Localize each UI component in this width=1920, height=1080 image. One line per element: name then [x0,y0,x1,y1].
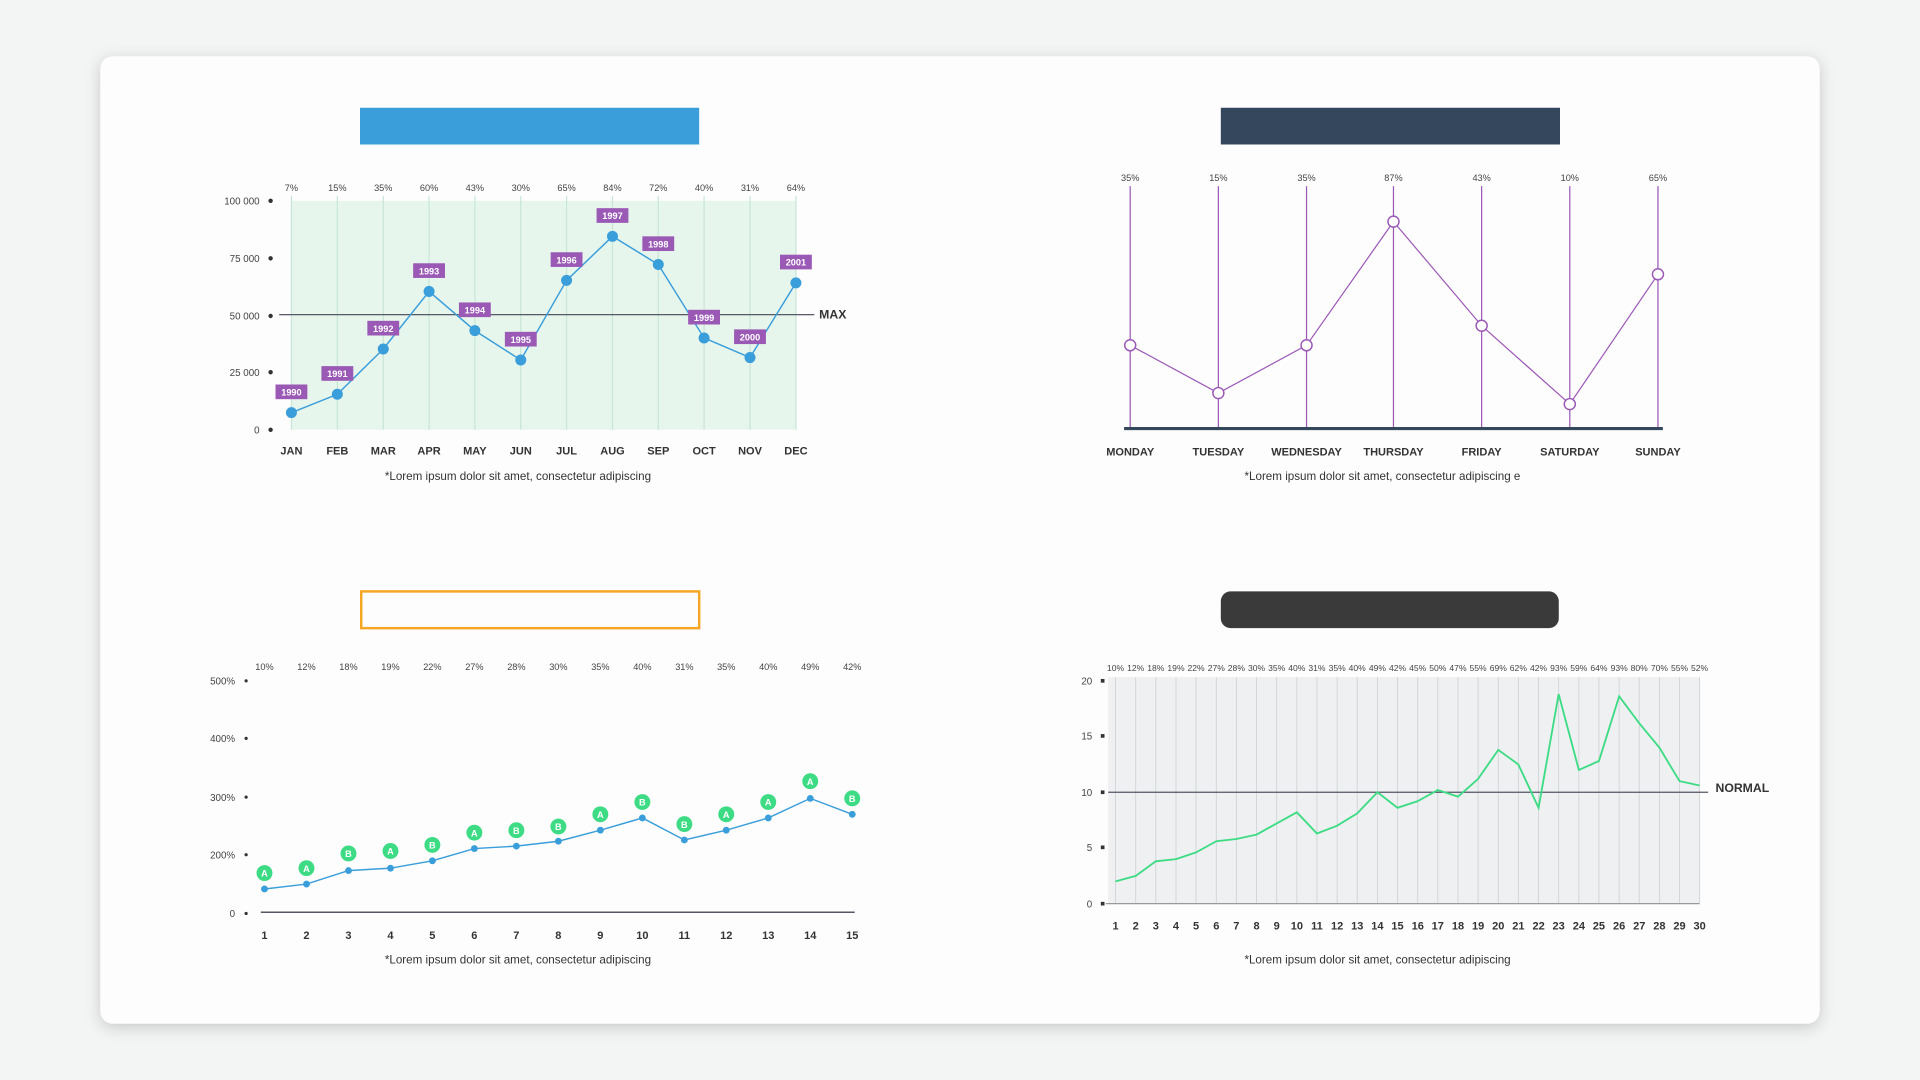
chart: 28 [1653,920,1666,932]
chart: 300% [210,793,235,804]
chart area: 31% [741,183,759,193]
chart: 3 [345,930,352,942]
chart area: MAY [463,445,487,457]
chart: A [261,869,268,879]
chart area: MAR [371,445,396,457]
chart: 35% [591,662,610,672]
chart area: 0 [254,425,260,436]
chart: 0 [230,909,236,920]
chart: 80% [1631,663,1648,673]
chart: 35% [1297,173,1316,183]
chart: 10% [255,662,274,672]
chart: 42% [843,662,861,672]
chart: 8 [555,930,561,942]
chart: 13 [1351,920,1363,932]
chart: NORMAL [1716,781,1770,795]
chart: 15% [1209,173,1228,183]
chart: A [723,810,730,820]
chart: 0 [1087,899,1093,910]
chart: 5 [1087,843,1093,854]
chart area: 30% [512,183,530,193]
chart: 31% [675,662,694,672]
chart area: JUL [556,445,577,457]
chart: A [471,828,478,838]
chart: 64% [1590,663,1608,673]
chart: 93% [1611,663,1628,673]
chart: TUESDAY [1193,447,1245,459]
chart: B [555,822,562,832]
chart area: JAN [280,445,302,457]
chart: 22% [423,662,442,672]
chart area: 2000 [740,332,760,342]
chart: 27% [1208,663,1225,673]
chart: 15 [846,930,858,942]
chart: 31% [1308,663,1326,673]
chart: 9 [1274,920,1280,932]
chart: 20 [1492,920,1504,932]
chart: 22% [1188,663,1205,673]
chart area: 64% [787,183,805,193]
chart: 50% [1429,663,1447,673]
chart area: SEP [647,445,669,457]
chart: 40% [1288,663,1306,673]
chart area: 1998 [648,239,668,249]
panel: growth chart [210,591,861,967]
chart: 27% [465,662,484,672]
chart area: 1995 [511,335,531,345]
chart: 8 [1254,920,1260,932]
chart: 70% [1651,663,1668,673]
chart: 24 [1573,920,1586,932]
chart [210,662,861,942]
chart area: 35% [374,183,392,193]
chart: A [387,847,394,857]
chart: 7 [1233,920,1239,932]
chart: 18% [339,662,358,672]
chart: 59% [1570,663,1588,673]
panel: daily chart [1081,591,1770,967]
chart area: 1990 [281,388,302,398]
chart: 15 [1391,920,1404,932]
chart: 35% [1121,173,1139,183]
chart: MONDAY [1106,447,1155,459]
chart: 45% [1409,663,1427,673]
chart: 12 [720,930,732,942]
chart: A [597,810,604,820]
chart: 21 [1512,920,1525,932]
panel: monthly line chart [224,108,847,483]
chart area [224,183,847,457]
chart: 17 [1432,920,1444,932]
chart area: 50 000 [230,312,260,323]
chart: 20 [1081,676,1093,687]
chart: 6 [1213,920,1219,932]
chart: 13 [762,930,774,942]
chart area: OCT [692,445,716,457]
chart [1081,663,1770,932]
chart: 12% [1127,663,1145,673]
caption: *Lorem ipsum dolor sit amet, consectetur adipiscing [385,470,651,483]
chart: 16 [1412,920,1424,932]
chart: 400% [210,734,235,745]
chart: 22 [1532,920,1545,932]
chart: 87% [1384,173,1403,183]
chart: 11 [1311,920,1323,932]
chart: 14 [1371,920,1384,932]
chart: 18% [1147,663,1165,673]
chart area: 75 000 [230,254,260,265]
chart: 55% [1671,663,1688,673]
chart area: 2001 [786,258,806,268]
chart: 35% [1268,663,1286,673]
chart: 1 [1112,920,1119,932]
chart area: 1996 [556,255,577,265]
title bar rounded dark [1221,591,1559,628]
chart: 2 [303,930,310,942]
chart area: 1992 [373,324,393,334]
chart: 12% [297,662,316,672]
chart area: 84% [603,183,622,193]
chart: 7 [513,930,519,942]
chart: 5 [429,930,435,942]
chart [1106,173,1681,459]
chart: 29 [1673,920,1686,932]
caption: *Lorem ipsum dolor sit amet, consectetur adipiscing [385,954,651,967]
chart: 10 [1081,788,1093,799]
chart area: 1997 [602,211,623,221]
chart: 65% [1649,173,1667,183]
chart: 30 [1693,920,1706,932]
chart: FRIDAY [1462,447,1502,459]
chart: 28% [1228,663,1245,673]
chart: SATURDAY [1540,447,1600,459]
chart: 4 [387,930,394,942]
chart: 40% [759,662,777,672]
chart: 49% [1369,663,1386,673]
chart: 10% [1561,173,1579,183]
title bar outline orange [361,591,699,628]
chart: 5 [1193,920,1199,932]
chart: 69% [1490,663,1507,673]
chart: 18 [1452,920,1464,932]
chart: 25 [1593,920,1605,932]
chart: 42% [1389,663,1406,673]
chart: 40% [1349,663,1366,673]
caption: *Lorem ipsum dolor sit amet, consectetur adipiscing [1244,954,1511,967]
chart area: 65% [557,183,576,193]
caption: *Lorem ipsum dolor sit amet, consectetur adipiscing e [1244,470,1520,483]
chart: 42% [1530,663,1548,673]
chart: 11 [679,930,690,942]
chart: 23 [1553,920,1565,932]
chart: B [849,794,856,804]
chart: 35% [1329,663,1346,673]
chart area: 1999 [694,313,714,323]
chart: 2 [1133,920,1139,932]
chart area: 60% [420,183,438,193]
chart: 19% [381,662,400,672]
chart: 19% [1167,663,1185,673]
chart: 14 [804,930,817,942]
panel: weekly chart [1106,108,1681,483]
chart area: DEC [784,445,808,457]
chart: 49% [801,662,819,672]
chart area: FEB [326,445,348,457]
chart: 6 [471,930,477,942]
chart: 10 [1291,920,1303,932]
chart: 19 [1472,920,1484,932]
chart: 93% [1550,663,1568,673]
chart: B [681,820,688,830]
chart: 27 [1633,920,1645,932]
chart: 26 [1613,920,1625,932]
title bar dark [1221,108,1560,144]
chart area: 1991 [327,369,348,379]
chart: SUNDAY [1635,447,1681,459]
title bar blue [360,108,699,144]
chart: 43% [1472,173,1491,183]
chart: 52% [1691,663,1709,673]
chart: THURSDAY [1363,447,1424,459]
chart: 10 [636,930,649,942]
chart: B [345,849,352,859]
chart: 40% [633,662,652,672]
chart: 1 [261,930,268,942]
chart area: 25 000 [230,368,260,379]
chart: A [807,777,814,787]
chart area: 40% [695,183,713,193]
chart area: 7% [285,183,298,193]
chart: 15 [1081,732,1093,743]
chart area: 1994 [465,305,486,315]
chart: A [303,864,310,874]
chart: 55% [1470,663,1487,673]
chart: 62% [1510,663,1527,673]
chart: 35% [717,662,735,672]
chart area: AUG [600,445,625,457]
chart: 47% [1449,663,1467,673]
chart: 30% [1248,663,1266,673]
chart: B [513,826,520,836]
chart: 9 [597,930,603,942]
chart: B [639,798,646,808]
chart: 4 [1173,920,1180,932]
chart: 12 [1331,920,1343,932]
chart area: 15% [328,183,347,193]
chart area: 72% [649,183,667,193]
chart: WEDNESDAY [1271,447,1342,459]
chart: 10% [1107,663,1124,673]
chart: 30% [549,662,568,672]
chart: 28% [507,662,526,672]
chart: 200% [210,850,235,861]
chart area: MAX [819,307,847,321]
chart: 500% [210,676,235,687]
chart area: 1993 [419,266,439,276]
chart area: 43% [466,183,484,193]
chart: B [429,841,436,851]
chart area: JUN [510,445,532,457]
chart area: APR [417,445,441,457]
chart area: 100 000 [224,196,260,207]
chart: A [765,798,772,808]
chart area: NOV [738,445,763,457]
chart: 3 [1153,920,1159,932]
